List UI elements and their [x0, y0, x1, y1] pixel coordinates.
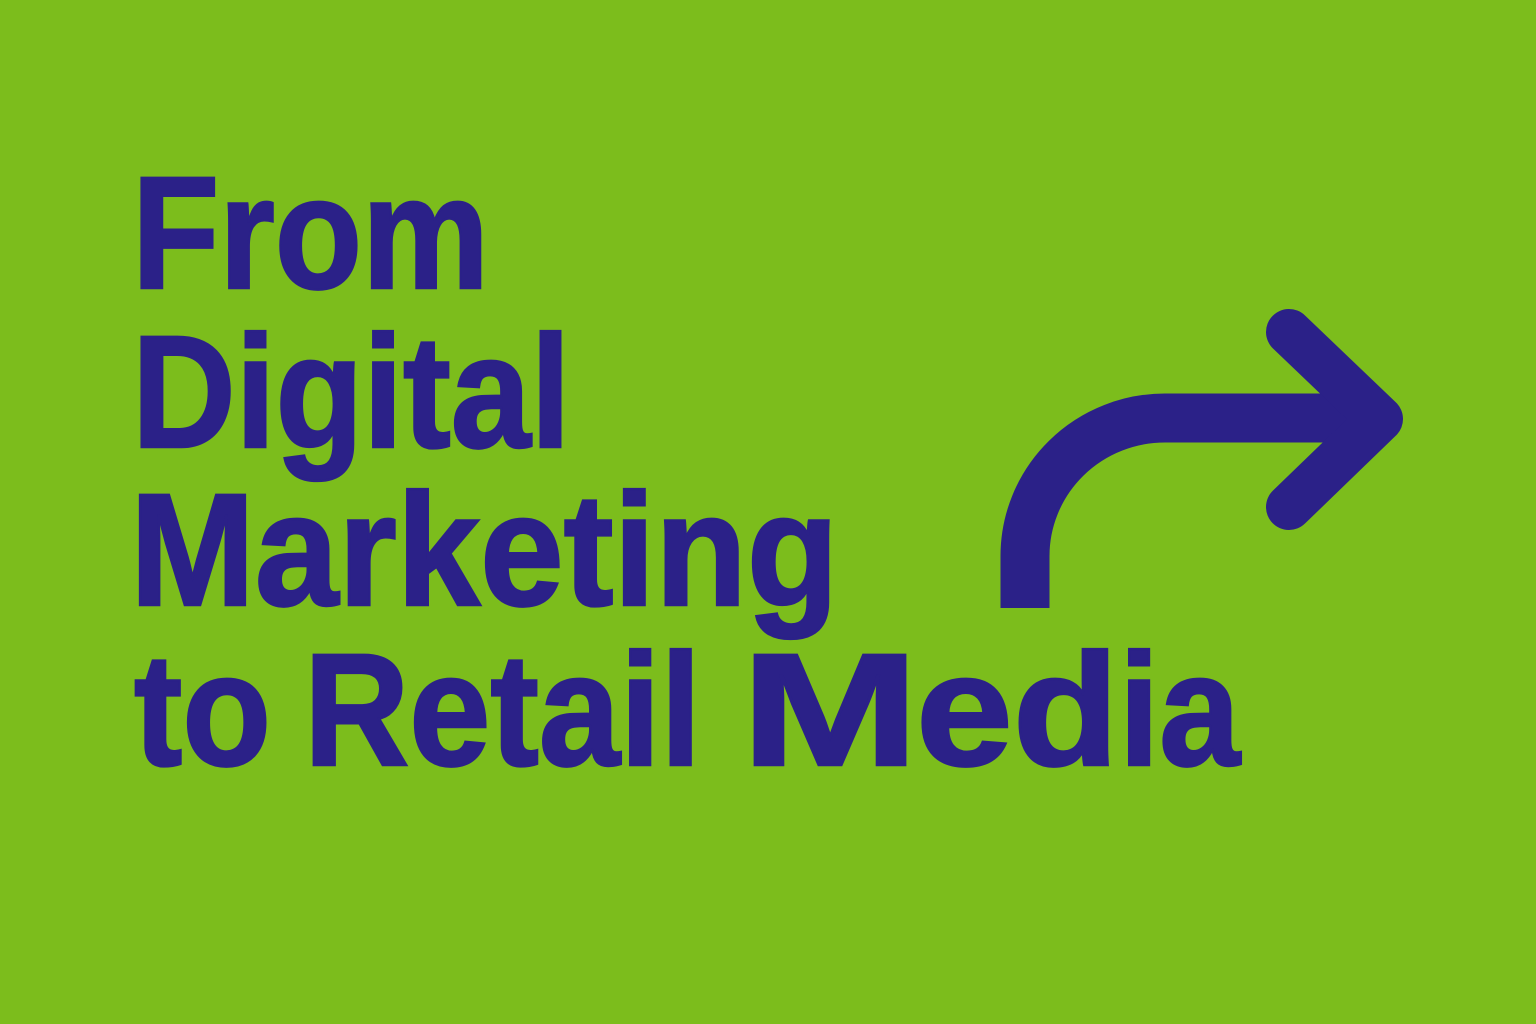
- title: Digital: [132, 302, 570, 481]
- title: [130, 143, 1242, 799]
- title: M: [741, 620, 919, 799]
- title: From: [132, 143, 489, 322]
- title: to: [134, 620, 271, 799]
- title: ia: [1119, 620, 1241, 799]
- icon: curved arrow: [1000, 309, 1403, 608]
- title: ed: [916, 620, 1119, 799]
- title: Retail: [304, 620, 701, 799]
- title: Marketing: [130, 460, 838, 639]
